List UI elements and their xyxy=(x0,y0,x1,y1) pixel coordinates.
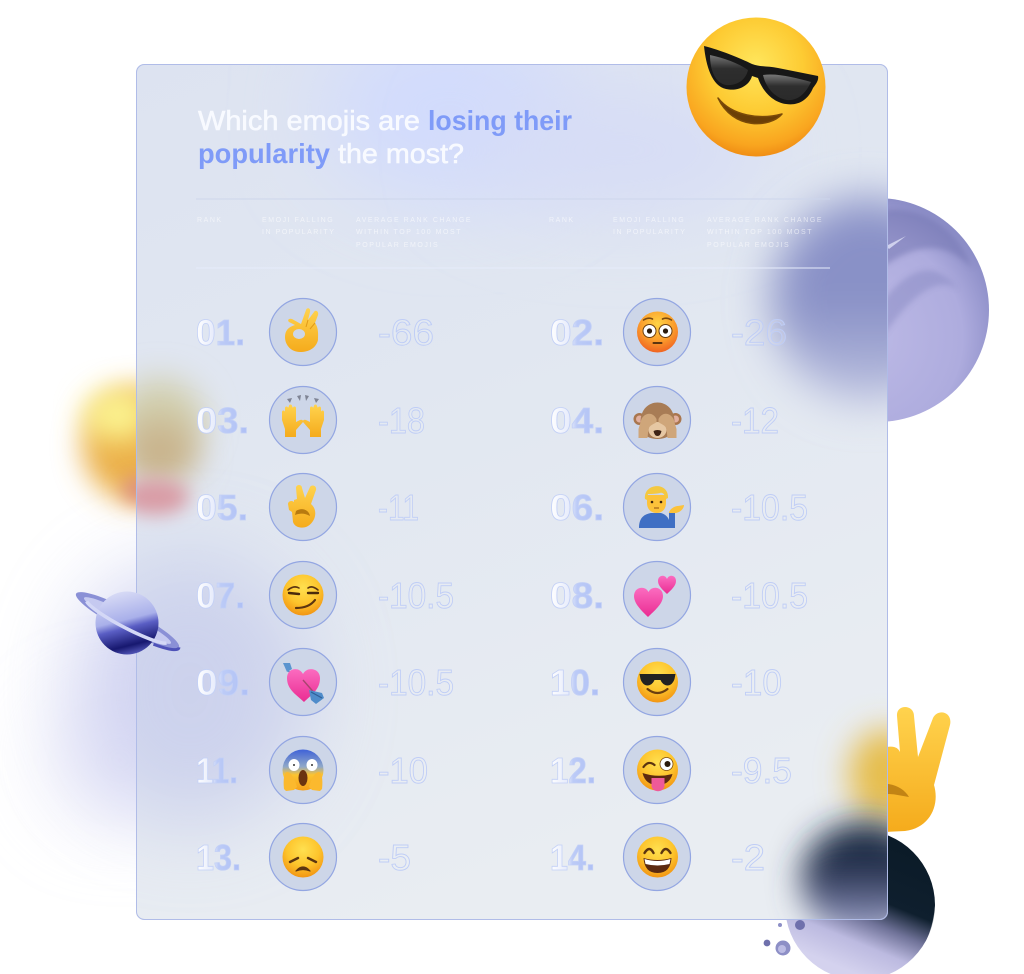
table header xyxy=(197,217,823,249)
row 05: 05. xyxy=(196,487,248,528)
row 06: 06. xyxy=(550,487,604,528)
row 02: -26 xyxy=(731,312,787,353)
table header: AVERAGE RANK CHANGE xyxy=(356,217,472,224)
icon: flushed face xyxy=(637,312,678,352)
decor: blurred lavender blob left xyxy=(50,570,257,820)
table header: POPULAR EMOJIS xyxy=(356,242,439,249)
title: the most? xyxy=(338,138,464,169)
icon: two hearts xyxy=(634,576,676,617)
table header: RANK xyxy=(197,217,223,224)
row 11 xyxy=(196,736,428,804)
row 12: -9.5 xyxy=(731,750,792,791)
row 10: 10. xyxy=(550,662,600,703)
row 09 xyxy=(196,648,454,716)
icon: face screaming in fear xyxy=(282,750,324,791)
row 13 xyxy=(196,824,411,890)
icon: ringed planet xyxy=(71,584,184,657)
row 07 xyxy=(196,562,454,628)
row 03: 03. xyxy=(196,400,249,441)
row 03 xyxy=(196,386,425,454)
table header: WITHIN TOP 100 MOST xyxy=(707,229,813,236)
row 07: -10.5 xyxy=(378,575,454,616)
row 14: -2 xyxy=(731,837,765,878)
row 12: 12. xyxy=(550,750,596,791)
icon: victory hand xyxy=(288,485,316,528)
row 08: 08. xyxy=(550,575,604,616)
row 08: -10.5 xyxy=(731,575,808,616)
row 02 xyxy=(550,298,787,366)
row 06: -10.5 xyxy=(731,487,808,528)
row 13: 13. xyxy=(196,837,241,878)
icon: smirking face xyxy=(282,574,324,616)
icon: man tipping hand xyxy=(639,486,684,528)
row 14 xyxy=(550,824,765,890)
table header: EMOJI FALLING xyxy=(262,217,334,224)
table header: POPULAR EMOJIS xyxy=(707,242,790,249)
row 01: 01. xyxy=(196,312,245,353)
title: popularity xyxy=(198,138,330,169)
title xyxy=(198,105,572,169)
row 04: 04. xyxy=(550,400,604,441)
row 02: 02. xyxy=(550,312,604,353)
row 10: -10 xyxy=(731,662,782,703)
table header: RANK xyxy=(549,217,575,224)
title: Which emojis are xyxy=(198,105,420,136)
icon: see-no-evil monkey xyxy=(634,402,682,439)
row 04 xyxy=(550,386,779,454)
icon: winking face with tongue xyxy=(637,750,678,791)
row 09: 09. xyxy=(196,662,250,703)
table header: EMOJI FALLING xyxy=(613,217,685,224)
row 07: 07. xyxy=(196,575,245,616)
icon: large sunglasses emoji xyxy=(686,18,826,156)
decor: blurred yellow emoji outside panel xyxy=(82,387,198,504)
row 10 xyxy=(550,648,782,716)
table header: IN POPULARITY xyxy=(262,229,335,236)
row 11: 11. xyxy=(196,750,238,791)
row 09: -10.5 xyxy=(378,662,454,703)
panel xyxy=(136,64,888,920)
icon: ok hand xyxy=(285,308,318,352)
title: losing their xyxy=(428,105,572,136)
icon: heart with arrow xyxy=(283,663,324,704)
row 03: -18 xyxy=(378,400,425,441)
table header: WITHIN TOP 100 MOST xyxy=(356,229,462,236)
table header: AVERAGE RANK CHANGE xyxy=(707,217,823,224)
icon: raised hands xyxy=(282,395,324,437)
icon: grinning face xyxy=(637,836,678,878)
row 12 xyxy=(550,736,792,804)
icon: disappointed face xyxy=(282,836,324,878)
row 08 xyxy=(550,562,808,628)
row 05: -11 xyxy=(378,487,419,528)
icon: sunglasses face xyxy=(637,662,678,702)
row 06 xyxy=(550,474,808,540)
row 01 xyxy=(196,298,434,366)
row 14: 14. xyxy=(550,837,595,878)
row 13: -5 xyxy=(378,837,411,878)
table header: IN POPULARITY xyxy=(613,229,686,236)
row 05 xyxy=(196,474,419,540)
decor: bubbles xyxy=(764,920,805,956)
decor: purple planet right xyxy=(888,198,989,422)
row 04: -12 xyxy=(731,400,779,441)
row 01: -66 xyxy=(378,312,434,353)
decor: dark planet bottom right xyxy=(785,830,938,974)
decor: peace hand right xyxy=(884,707,950,832)
row 11: -10 xyxy=(378,750,428,791)
